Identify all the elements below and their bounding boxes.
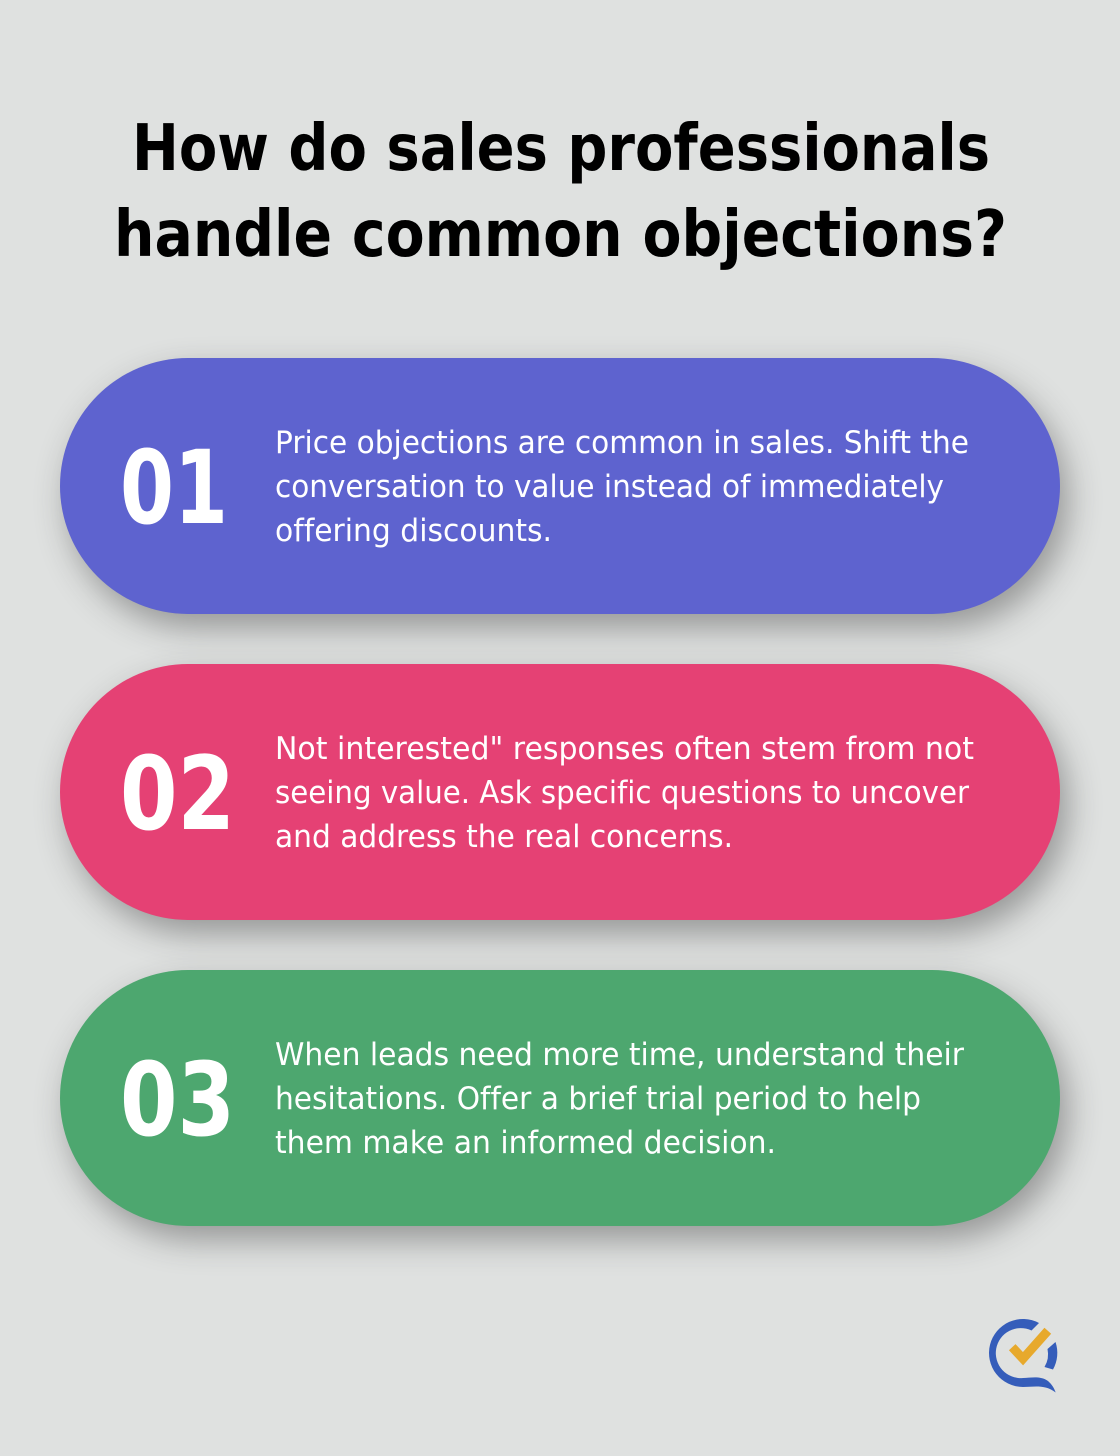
step 03 number: 03 [120,1041,235,1160]
step 01 text: Price objections are common in sales. Shift the [275,425,969,461]
title: How do sales professionals [132,112,990,186]
step 03 text [275,1037,964,1161]
step 02 number: 02 [120,735,235,854]
step 03 text: hesitations. Offer a brief trial period to help [275,1081,921,1117]
panel: step 02 background [60,664,1060,920]
step 02 text [275,731,974,855]
step 02 text: Not interested" responses often stem from not [275,731,974,767]
panel: step 01 background [60,358,1060,614]
panel: step 03 background [60,970,1060,1226]
step 02 text: and address the real concerns. [275,819,733,855]
title [114,112,1007,272]
step 01 text [275,425,969,549]
step 01 text: offering discounts. [275,513,552,549]
step 03 text: When leads need more time, understand their [275,1037,964,1073]
icon: logo speech bubble with check mark [989,1319,1057,1392]
step 03 text: them make an informed decision. [275,1125,776,1161]
title: handle common objections? [114,198,1007,272]
step 02 text: seeing value. Ask specific questions to uncover [275,775,969,811]
step 01 text: conversation to value instead of immediately [275,469,944,505]
step 01 number: 01 [120,429,228,548]
